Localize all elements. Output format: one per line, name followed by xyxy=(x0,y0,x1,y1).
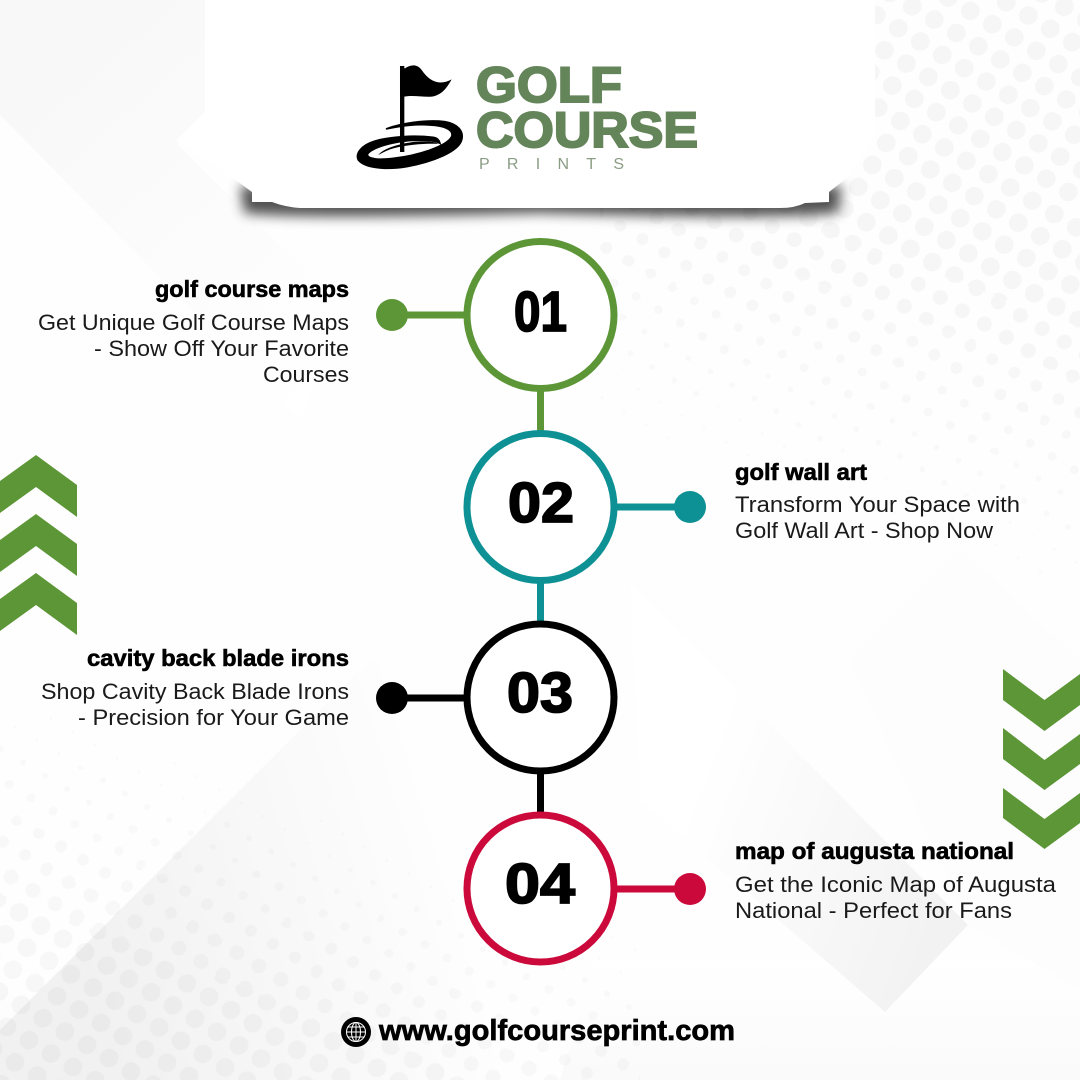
step 02 xyxy=(467,434,706,580)
icon: globe xyxy=(341,1017,371,1047)
text block: map of augusta national: National - Perfect for Fans xyxy=(735,898,1012,923)
text block: map of augusta national xyxy=(735,838,1057,923)
text block: golf course maps xyxy=(38,276,349,387)
step 01 ring xyxy=(467,242,614,388)
step 02 ring xyxy=(467,434,614,580)
step 04 xyxy=(467,815,706,962)
text block: cavity back blade irons xyxy=(41,645,349,730)
logo: wordmark: GOLF xyxy=(476,57,622,113)
text block: golf course maps: golf course maps xyxy=(155,276,349,302)
text block: golf course maps: - Show Off Your Favorite xyxy=(94,336,349,361)
text block: golf wall art: Golf Wall Art - Shop Now xyxy=(735,518,994,543)
logo: flag and green xyxy=(357,65,462,168)
text block: cavity back blade irons: Shop Cavity Back Blade Irons xyxy=(41,679,349,704)
text block: map of augusta national: map of augusta national xyxy=(735,838,1014,864)
text block: golf course maps: Courses xyxy=(263,362,349,387)
step 04 number: 04 xyxy=(505,852,575,916)
timeline connectors xyxy=(537,390,544,814)
step 01 xyxy=(376,242,614,388)
step 01 leader and dot xyxy=(376,299,466,331)
logo: wordmark: COURSE xyxy=(476,102,698,158)
footer website xyxy=(341,1015,735,1047)
icon: upward green chevrons xyxy=(0,455,77,635)
step 04 ring xyxy=(467,815,614,962)
text block: map of augusta national: Get the Iconic Map of Augusta xyxy=(735,872,1057,897)
step 02 leader and dot xyxy=(615,491,706,523)
step 03 xyxy=(376,624,614,771)
header panel with logo xyxy=(176,0,875,216)
logo: wordmark: PRINTS xyxy=(479,156,624,173)
step 01 number: 01 xyxy=(514,280,567,344)
step 04 leader and dot xyxy=(615,873,706,905)
text block: cavity back blade irons: cavity back blade irons xyxy=(87,645,349,671)
website url: www.golfcourseprint.com xyxy=(378,1015,735,1047)
step 03 leader and dot xyxy=(376,682,466,714)
text block: golf wall art: Transform Your Space with xyxy=(735,492,1020,517)
logo: wordmark xyxy=(476,57,698,173)
text block: golf course maps: Get Unique Golf Course Maps xyxy=(38,310,349,335)
text block: golf wall art: golf wall art xyxy=(735,459,867,485)
step 03 ring xyxy=(467,624,614,771)
icon: downward green chevrons xyxy=(1003,669,1080,849)
panel: white header card xyxy=(176,0,875,208)
step 03 number: 03 xyxy=(507,661,573,725)
text block: cavity back blade irons: - Precision for Your Game xyxy=(78,705,349,730)
step 02 number: 02 xyxy=(508,471,574,535)
text block: golf wall art xyxy=(735,459,1020,543)
panel shadow xyxy=(240,186,842,216)
